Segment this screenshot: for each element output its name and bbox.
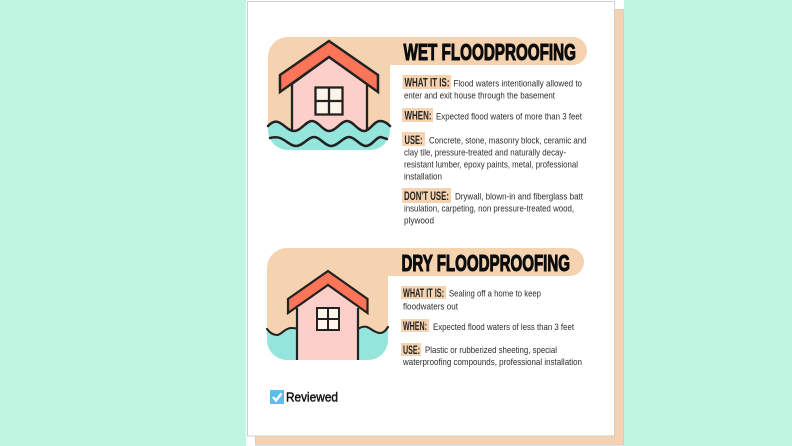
dry: use: Plastic or rubberized sheeting, special (425, 345, 557, 355)
wet: what it is: Flood waters intentionally allowed to (454, 78, 582, 88)
wet: what it is: enter and exit house through the basement (404, 90, 555, 100)
wet: use: Concrete, stone, masonry block, ceramic and (429, 136, 586, 146)
dry: when: Expected flood waters of less than 3 feet (433, 322, 574, 332)
white page (248, 2, 614, 436)
wet: don't use: plywood (404, 216, 434, 226)
wet: use: resistant lumber, epoxy paints, metal, professional (404, 160, 578, 170)
dry: use (401, 343, 582, 367)
wet: what it is (402, 75, 582, 100)
logo: Reviewed (270, 390, 338, 404)
panel: wet floodproofing (268, 37, 587, 226)
wet: when (402, 108, 582, 122)
icon: house with water kept out, dry (267, 271, 388, 360)
wet: don't use: Drywall, blown-in and fiberglass batt (455, 192, 583, 202)
wet: don't use (402, 188, 583, 226)
heading: wet floodproofing: WET FLOODPROOFING (404, 39, 576, 65)
dry: what it is: Sealing off a home to keep (449, 288, 541, 298)
wet: use (402, 132, 586, 182)
wet: when: Expected flood waters of more than 3 feet (436, 112, 582, 122)
dry illustration background and heading band (267, 248, 584, 360)
dry: what it is (401, 286, 541, 312)
dry: what it is: floodwaters out (403, 302, 458, 312)
dry: use: waterproofing compounds, professional installation (402, 357, 582, 367)
icon: checkmark box (270, 390, 284, 404)
dry: when (401, 319, 574, 333)
wet: what it is: WHAT IT IS: (404, 78, 450, 90)
wordmark: Reviewed (286, 390, 338, 404)
wet: don't use: insulation, carpeting, non pressure-treated wood, (404, 204, 574, 214)
dry: use: USE: (403, 345, 420, 357)
panel: dry floodproofing (267, 248, 584, 367)
peach backing sheet (256, 10, 624, 445)
wet: when: WHEN: (404, 110, 432, 122)
wet: use: USE: (404, 135, 422, 147)
icon: flooded house, wet (268, 41, 390, 150)
wet illustration background and heading band (268, 37, 587, 150)
heading: dry floodproofing: DRY FLOODPROOFING (402, 250, 570, 276)
wet: use: clay tile, pressure-treated and naturally decay- (404, 148, 566, 158)
dry: what it is: WHAT IT IS: (403, 288, 444, 300)
wet: use: installation (404, 172, 442, 182)
wet: don't use: DON'T USE: (404, 191, 449, 203)
dry: when: WHEN: (403, 321, 427, 333)
